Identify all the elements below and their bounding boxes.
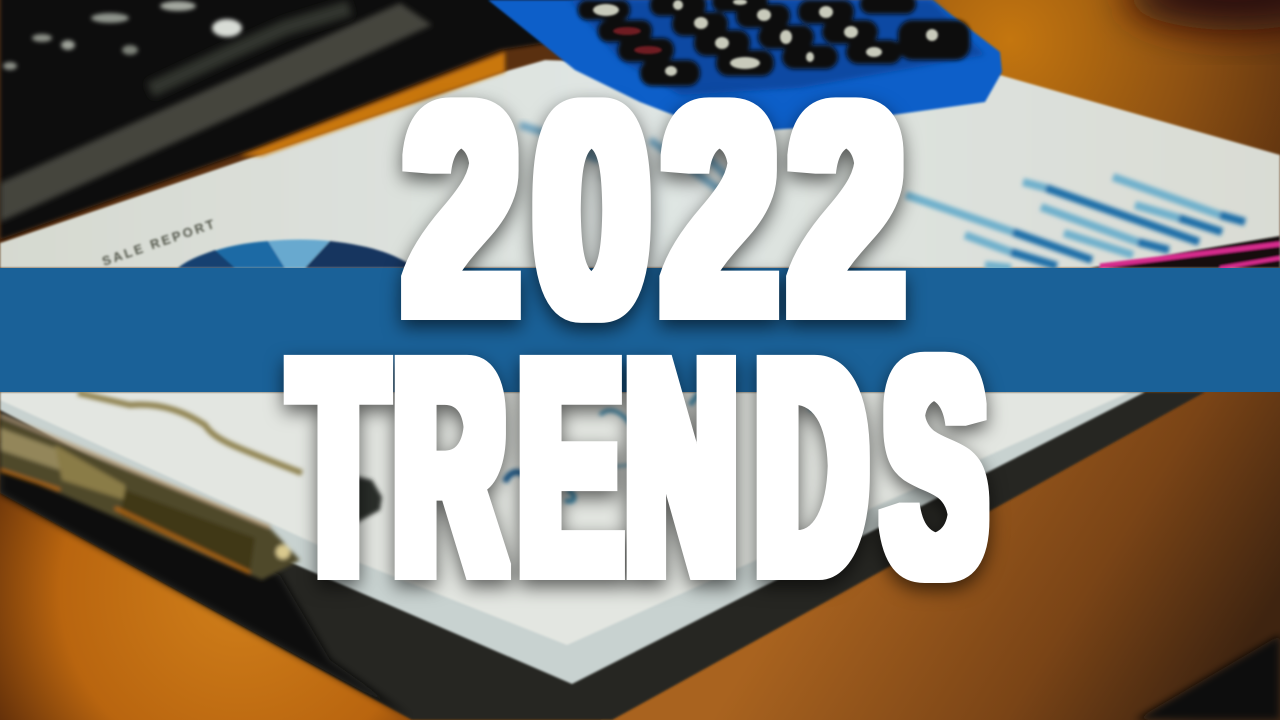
clipboard folder xyxy=(0,392,1205,720)
pens xyxy=(1090,236,1280,268)
metal clip xyxy=(0,393,382,580)
bars behind digits xyxy=(520,125,740,195)
title line: 2022: 2022 xyxy=(404,46,904,376)
blue horizontal band xyxy=(0,268,1280,392)
calculator keys xyxy=(578,0,970,86)
keyboard xyxy=(0,0,600,240)
pie chart xyxy=(178,240,412,268)
title line: TRENDS: TRENDS xyxy=(292,296,985,637)
title: 2022 TRENDS xyxy=(292,46,985,637)
paper sheets lower xyxy=(0,392,1145,684)
sale report label: SALE REPORT xyxy=(100,216,218,269)
calculator xyxy=(488,0,1002,133)
right bar chart xyxy=(906,177,1245,268)
paper upper xyxy=(0,60,1280,268)
lower chart marks xyxy=(505,392,820,501)
